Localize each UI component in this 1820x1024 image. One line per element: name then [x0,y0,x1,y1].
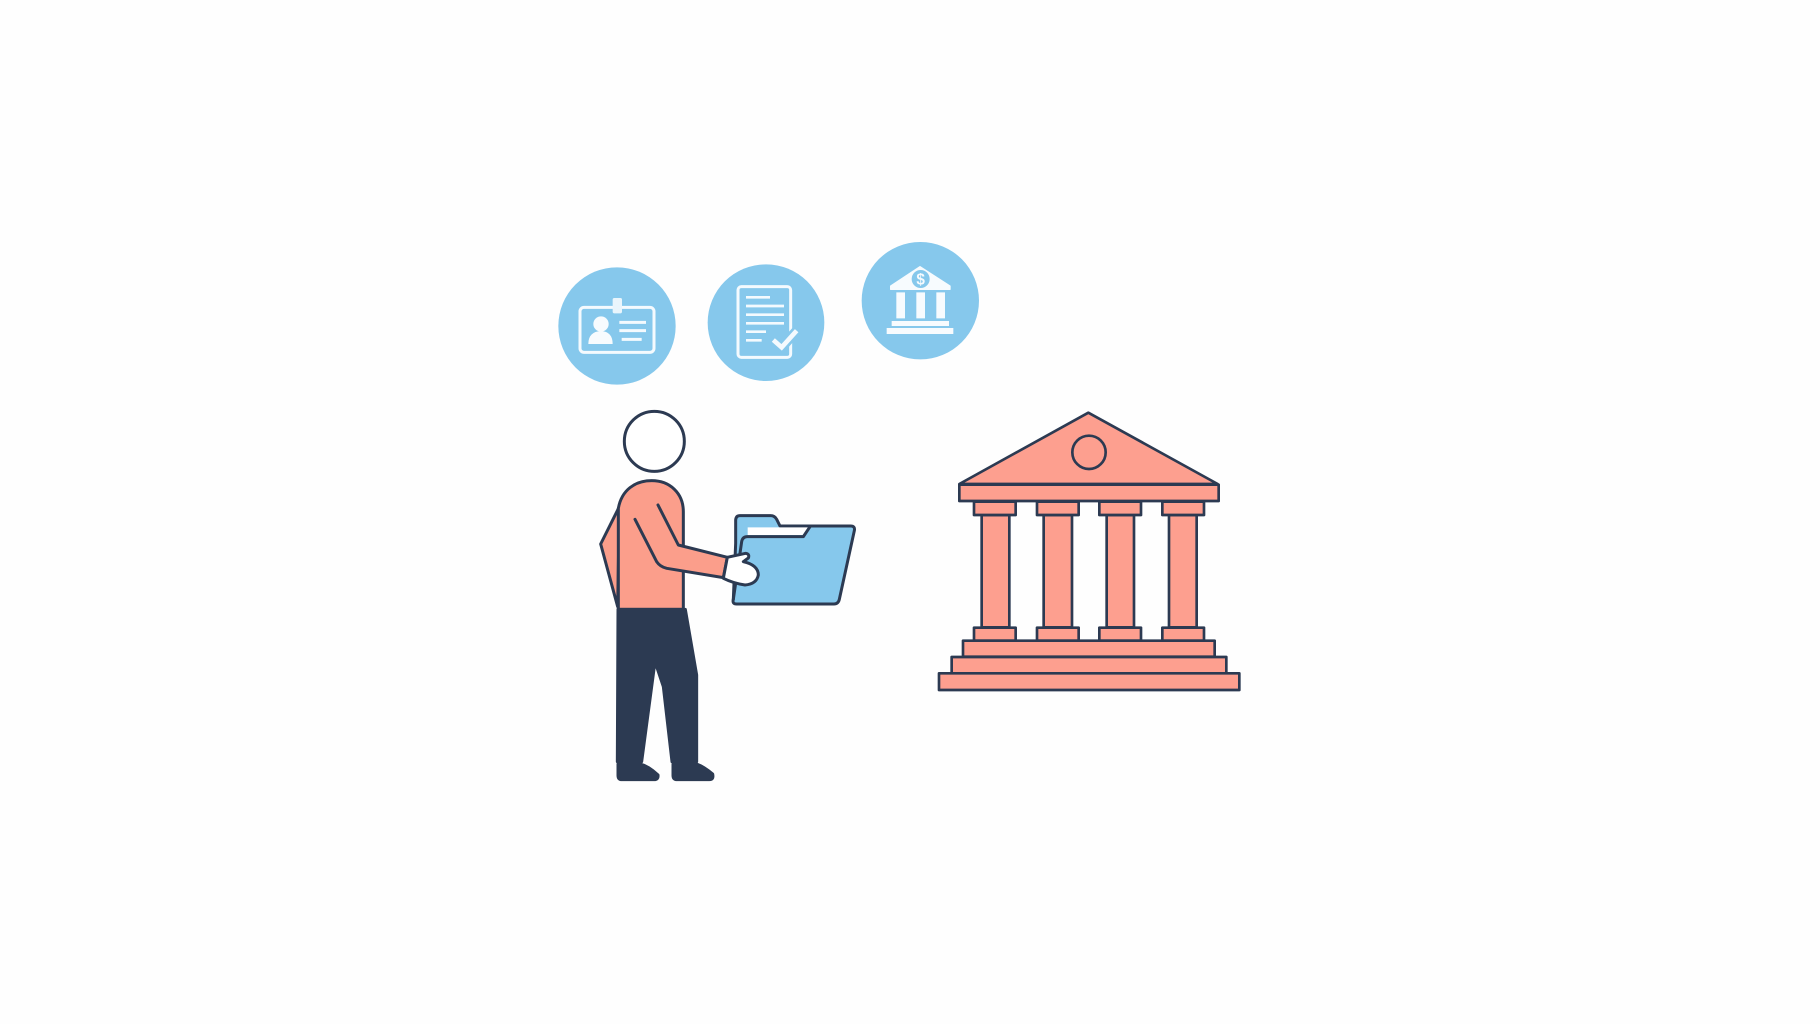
torso [618,481,683,609]
icon: document with check mark [708,264,824,381]
arm [635,505,727,578]
left shoe [618,764,658,780]
icon: ID card badge [558,267,676,385]
column 4 [1162,502,1204,641]
head [624,411,684,471]
pediment [959,413,1218,484]
icon: bank with dollar sign [862,242,979,359]
back arm [601,507,619,607]
hand [723,553,758,585]
column 3 [1099,502,1141,641]
entablature [959,485,1219,501]
icon: bank with dollar sign: $ [916,272,925,289]
person holding folder [601,411,855,780]
steps [939,641,1239,690]
column 2 [1037,502,1079,641]
right shoe [673,764,713,780]
column 1 [974,502,1016,641]
trousers [617,609,697,762]
pediment circle [1072,436,1106,469]
bank building [939,413,1239,690]
folder [733,516,855,604]
